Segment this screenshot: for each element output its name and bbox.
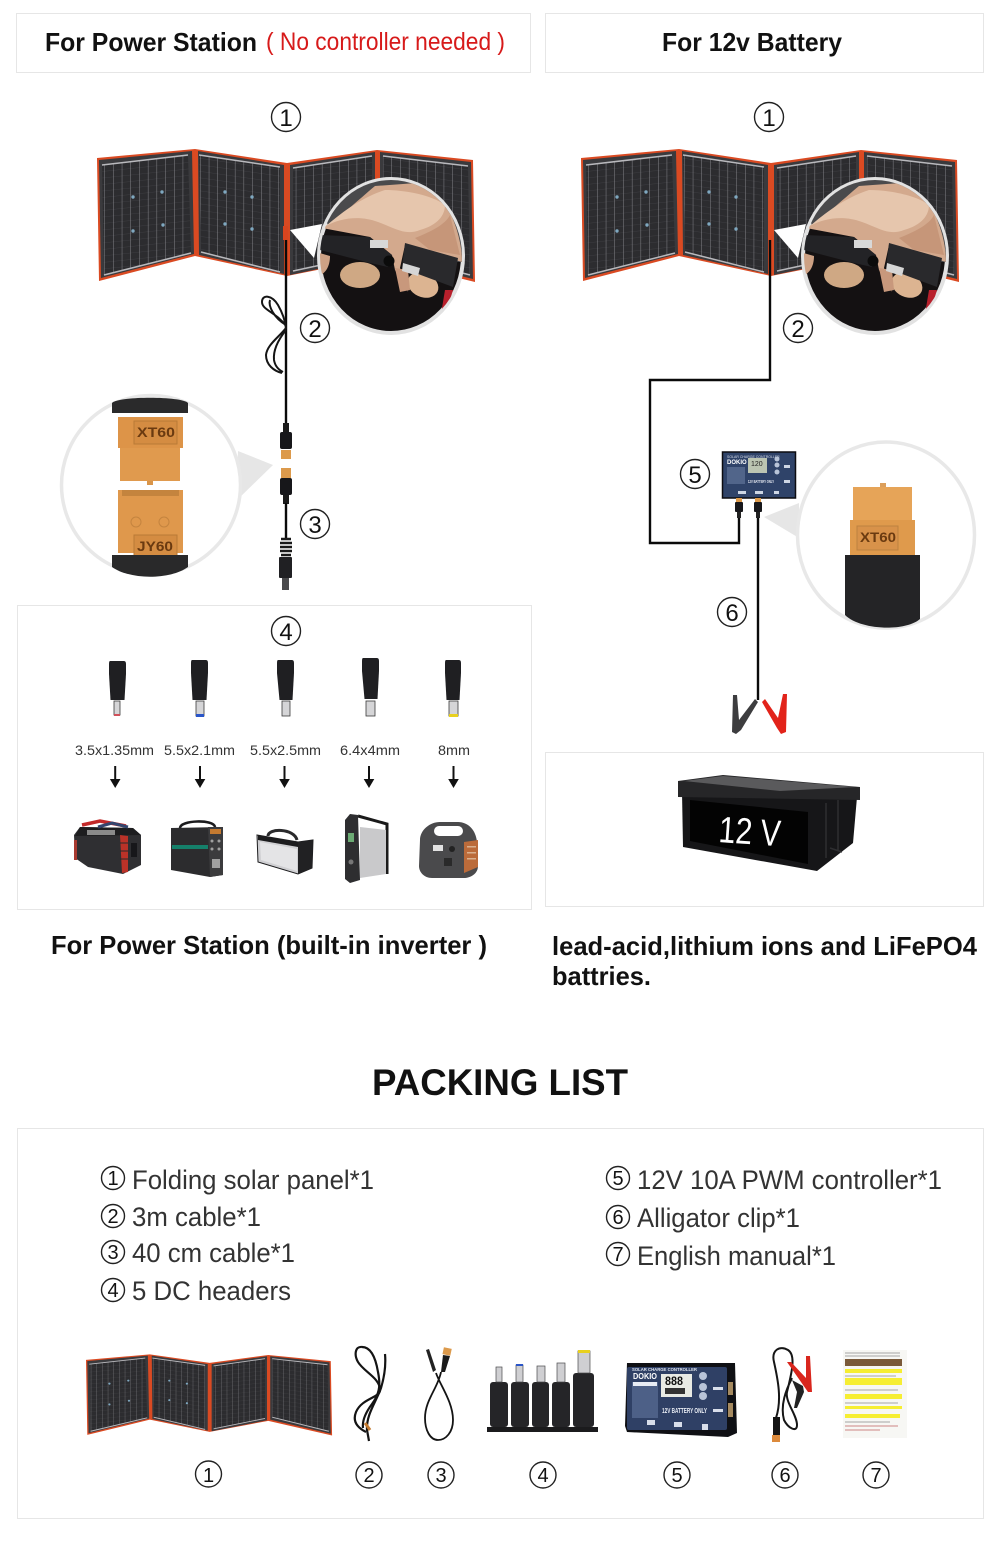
list: left column: 2 xyxy=(107,1206,119,1228)
callout: XT60 and JY60 connectors: XT60 xyxy=(137,424,175,440)
item 5: PWM controller xyxy=(625,1363,737,1437)
item 3: 40 cm cable xyxy=(425,1347,453,1440)
item numbers row: 5 xyxy=(671,1465,683,1487)
item 6: alligator clip cable xyxy=(772,1348,812,1442)
number 6: 6 xyxy=(725,600,739,627)
PWM controller: 120 xyxy=(751,461,763,468)
battery body xyxy=(678,775,860,871)
number 4 xyxy=(272,616,300,646)
item numbers row: 1 xyxy=(203,1465,214,1487)
solar panel right xyxy=(581,149,959,282)
list: left column: 5 DC headers xyxy=(132,1276,291,1306)
heading: packing list: PACKING LIST xyxy=(372,1062,628,1103)
list: right column xyxy=(606,1165,942,1271)
PWM controller: SOLAR CHARGE CONTROLLER xyxy=(727,455,780,459)
item numbers row: 3 xyxy=(435,1465,447,1487)
panel: 12v battery xyxy=(546,752,984,906)
size labels: 8mm xyxy=(438,742,470,758)
power station 4 xyxy=(345,814,387,883)
number 2 left xyxy=(300,314,330,343)
power station 3 xyxy=(257,830,313,874)
callout pointer: SAE connector left xyxy=(290,224,322,258)
size labels: 5.5x2.1mm xyxy=(164,742,235,758)
caption: battery types: battries. xyxy=(552,961,651,991)
list: left column: Folding solar panel*1 xyxy=(132,1165,374,1195)
connection cable: power station xyxy=(262,226,292,590)
number 1 right: 1 xyxy=(762,105,776,132)
list: left column: 3 xyxy=(107,1242,119,1264)
list: right column: 6 xyxy=(612,1207,624,1229)
item numbers row: 2 xyxy=(363,1465,375,1487)
item numbers row: 4 xyxy=(537,1465,549,1487)
battery label plate xyxy=(690,800,808,864)
list: right column: Alligator clip*1 xyxy=(637,1203,800,1233)
list: right column: 7 xyxy=(612,1244,624,1266)
callout: XT60 and JY60 connectors xyxy=(62,396,240,577)
number 1 left xyxy=(272,102,300,132)
callout pointer: XT60 JY60 xyxy=(236,451,273,501)
list: left column: 40 cm cable*1 xyxy=(132,1238,295,1268)
list: left column xyxy=(102,1165,374,1306)
size labels: 5.5x2.5mm xyxy=(250,742,321,758)
DC headers row xyxy=(109,658,461,717)
callout: SAE connector right xyxy=(800,179,947,333)
size labels: 3.5x1.35mm xyxy=(75,742,154,758)
size labels xyxy=(75,742,470,758)
list: left column: 4 xyxy=(107,1280,119,1302)
list: left column: 1 xyxy=(107,1168,119,1190)
callout pointer: SAE connector right xyxy=(774,224,806,258)
callout: XT60 connector xyxy=(798,442,974,628)
callout pointer: XT60 right xyxy=(764,503,799,538)
number 2 right xyxy=(784,314,812,343)
number 4: 4 xyxy=(279,619,293,646)
caption: battery types: lead-acid,lithium ions and LiFePO4 xyxy=(552,931,978,961)
battery voltage label: 12 V xyxy=(717,809,782,854)
item 5: PWM controller: SOLAR CHARGE CONTROLLER xyxy=(632,1367,698,1372)
connection cable: 12v battery xyxy=(650,240,770,700)
header: for power station: ( No controller needed ) xyxy=(266,28,505,56)
caption: battery types xyxy=(552,931,978,991)
number 6 xyxy=(718,598,746,627)
item 7: english manual xyxy=(843,1350,907,1438)
down arrows xyxy=(110,766,459,788)
caption: power station: For Power Station (built-in inverter ) xyxy=(51,930,487,960)
list: right column: 5 xyxy=(612,1168,624,1190)
size labels: 6.4x4mm xyxy=(340,742,400,758)
item 5: PWM controller: 888 xyxy=(665,1374,683,1388)
item numbers row: 7 xyxy=(870,1465,882,1487)
item numbers row xyxy=(196,1461,889,1488)
list: left column: 3m cable*1 xyxy=(132,1202,261,1232)
PWM controller xyxy=(722,452,796,518)
item 5: PWM controller: DOKIO xyxy=(633,1372,657,1381)
header: for power station: For Power Station xyxy=(45,27,257,57)
callout: XT60 and JY60 connectors: JY60 xyxy=(137,538,173,554)
item 2: 3m cable xyxy=(355,1347,385,1441)
item numbers row: 6 xyxy=(779,1465,791,1487)
power station 5 xyxy=(419,822,478,878)
header: for 12v battery: For 12v Battery xyxy=(662,27,843,57)
PWM controller: DOKIO xyxy=(727,460,747,466)
solar panel left xyxy=(97,149,475,282)
number 3 xyxy=(300,510,330,539)
number 5 xyxy=(680,460,710,489)
alligator clips xyxy=(732,694,787,734)
list: right column: 12V 10A PWM controller*1 xyxy=(637,1165,942,1195)
header: for power station xyxy=(16,14,530,72)
callout: XT60 connector: XT60 xyxy=(860,529,896,545)
number 2 left: 2 xyxy=(308,316,322,343)
item 4: DC headers set xyxy=(487,1350,598,1432)
number 3: 3 xyxy=(308,512,322,539)
number 5: 5 xyxy=(688,462,702,489)
header: for 12v battery xyxy=(546,14,984,72)
item 1: folding solar panel xyxy=(86,1354,332,1436)
number 2 right: 2 xyxy=(791,316,805,343)
callout: SAE connector left xyxy=(316,179,463,333)
list: right column: English manual*1 xyxy=(637,1241,836,1271)
panel: DC headers and power stations xyxy=(18,606,532,910)
power station 1 xyxy=(74,821,141,874)
PWM controller: 12V BATTERY ONLY xyxy=(748,479,774,484)
number 1 right xyxy=(754,102,784,132)
number 1 left: 1 xyxy=(279,105,293,132)
panel: packing list xyxy=(18,1128,984,1518)
power station 2 xyxy=(171,821,223,877)
item 5: PWM controller: 12V BATTERY ONLY xyxy=(662,1408,707,1415)
